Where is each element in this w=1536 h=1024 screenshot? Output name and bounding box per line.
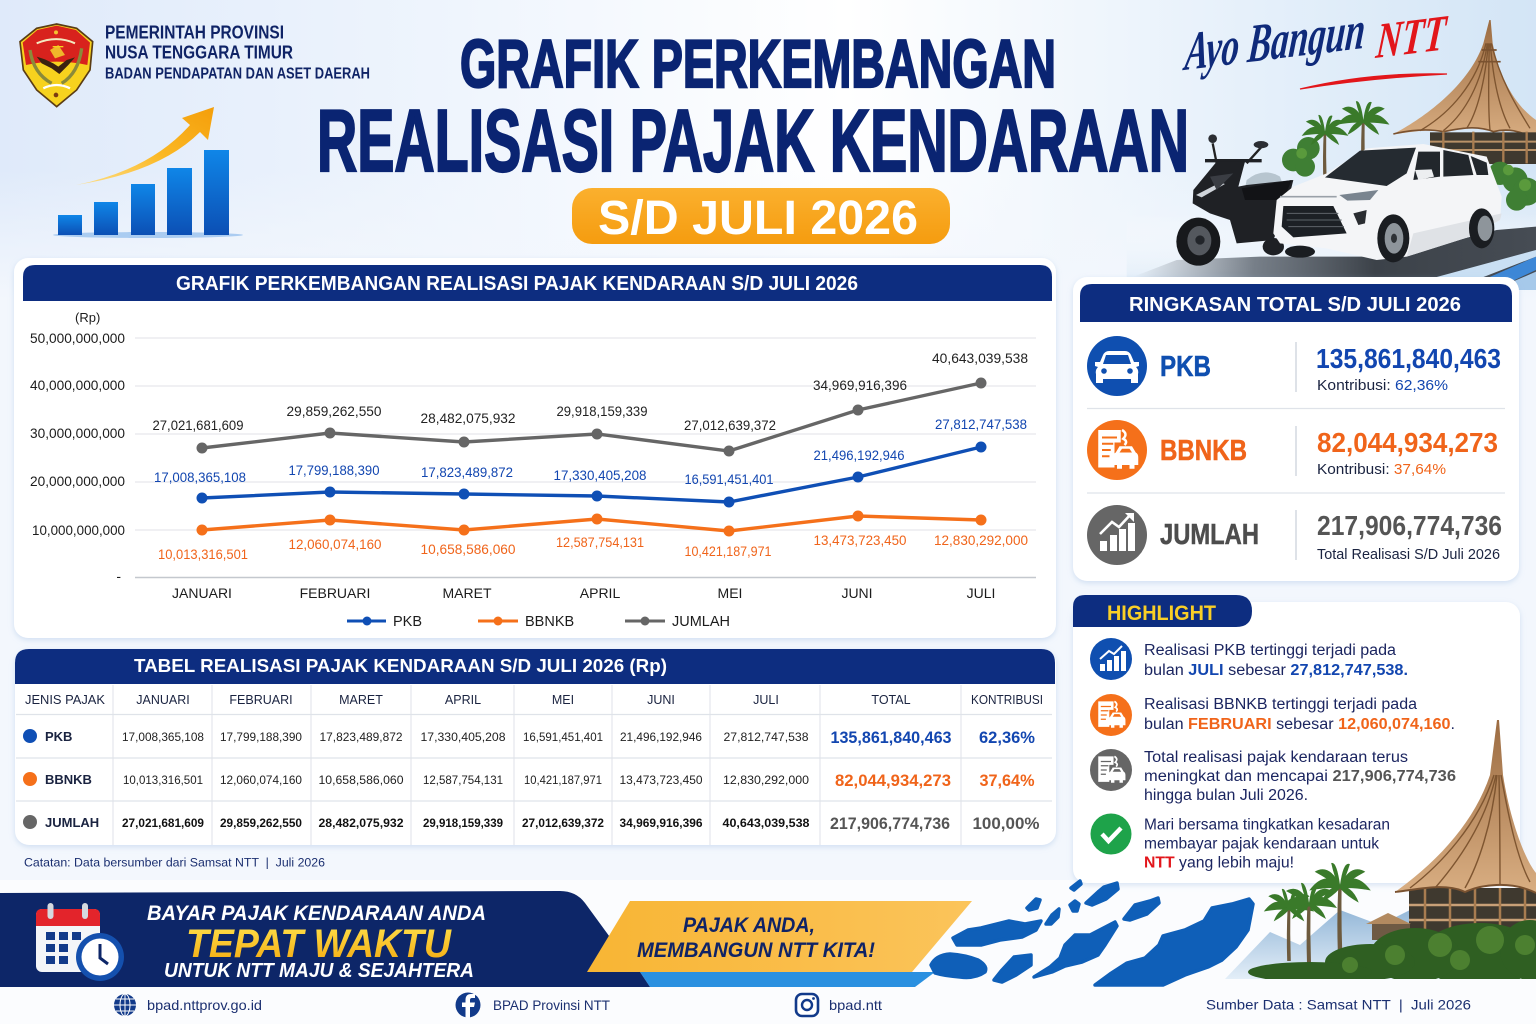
summary row: PKB [1087,336,1501,396]
row: BBNKB: 12,830,292,000 [723,773,809,787]
footer: facebook: BPAD Provinsi NTT [493,997,610,1013]
row: PKB: 17,330,405,208 [420,730,506,744]
table heading: TABEL REALISASI PAJAK KENDARAAN S/D JULI 2026 (Rp) [134,655,667,676]
data labels: JUMLAH: 27,021,681,609 [152,418,244,433]
footer: instagram: bpad.ntt [829,997,882,1013]
legend: PKB [393,614,422,630]
data labels: JUMLAH: 28,482,075,932 [420,411,516,426]
summary row: BBNKB: Kontribusi: 37,64% [1317,462,1446,478]
data labels: PKB: 16,591,451,401 [684,472,774,487]
data labels: PKB: 27,812,747,538 [935,417,1027,432]
highlight: PKB: bulan JULI sebesar 27,812,747,538. [1144,662,1408,679]
organisation name: NUSA TENGGARA TIMUR [105,42,293,62]
table column headers: JANUARI [136,693,190,707]
data labels: PKB [154,417,1027,487]
row: JUMLAH: 29,918,159,339 [423,816,503,830]
data labels: BBNKB: 10,421,187,971 [684,544,772,559]
x axis labels: APRIL [580,585,620,601]
footer: facebook [456,992,610,1018]
icon: rising bar chart with arrow [53,107,243,238]
table column headers [25,693,1043,707]
organisation name [105,22,370,82]
row: BBNKB: 13,473,723,450 [620,773,703,787]
data labels: BBNKB: 12,060,074,160 [288,537,382,552]
highlight: total [1090,749,1456,804]
organisation name: BADAN PENDAPATAN DAN ASET DAERAH [105,66,370,82]
highlight: BBNKB [1090,694,1455,736]
highlight: total: hingga bulan Juli 2026. [1144,787,1308,804]
legend: JUMLAH [672,614,730,630]
summary row: JUMLAH: Total Realisasi S/D Juli 2026 [1317,547,1500,563]
row: PKB: 16,591,451,401 [523,730,603,744]
x axis labels: JANUARI [172,585,232,601]
table note: Catatan: Data bersumber dari Samsat NTT | Juli 2026 [24,856,325,870]
summary row: BBNKB: BBNKB [1160,435,1247,467]
data labels: PKB: 17,799,188,390 [288,463,380,478]
x axis labels: MARET [442,585,492,601]
y axis labels: (Rp) [75,310,100,325]
title [317,26,1189,190]
y axis labels: 40,000,000,000 [30,377,125,393]
row: PKB: 17,799,188,390 [220,730,302,744]
summary row: BBNKB: 82,044,934,273 [1317,427,1498,458]
y axis labels: 50,000,000,000 [30,330,125,346]
panel: line chart [14,258,1056,638]
row: BBNKB: 10,421,187,971 [524,773,602,787]
summary row: PKB: PKB [1160,351,1211,383]
x axis labels: JUNI [841,585,873,601]
title: GRAFIK PERKEMBANGAN [460,26,1056,102]
slogan: pay on time: TEPAT WAKTU [186,922,452,966]
x axis labels [172,585,995,601]
panel: summary totals [1073,277,1519,581]
row: JUMLAH: JUMLAH [45,815,99,830]
summary row: PKB: Kontribusi: 62,36% [1317,378,1448,394]
data labels: JUMLAH: 29,859,262,550 [286,404,382,419]
data labels: BBNKB: 13,473,723,450 [814,533,906,548]
table column headers: JUNI [647,693,675,707]
panel: highlight [1073,595,1520,883]
data labels: PKB: 17,823,489,872 [421,465,513,480]
y axis labels: 10,000,000,000 [32,522,125,538]
highlight tab [1073,595,1252,627]
summary row: BBNKB [1087,420,1498,480]
legend [347,614,730,630]
row: PKB: 21,496,192,946 [620,730,702,744]
scooter [1176,134,1293,266]
logo: provincial shield [20,24,93,107]
row: BBNKB: 10,658,586,060 [318,773,404,787]
chart heading [23,265,1052,301]
data labels: BBNKB: 12,830,292,000 [934,533,1028,548]
row: JUMLAH: 27,021,681,609 [122,816,204,830]
row: BBNKB: 12,587,754,131 [423,773,503,787]
highlight: total: meningkat dan mencapai 217,906,774,736 [1144,768,1456,785]
row: PKB: 62,36% [979,728,1035,747]
x axis labels: MEI [718,585,742,601]
footer: instagram [796,994,882,1016]
callout: yellow parallelogram slogan: MEMBANGUN NTT KITA! [637,939,875,962]
highlight: PKB [1090,638,1408,680]
summary row: JUMLAH: 217,906,774,736 [1317,510,1502,541]
row: PKB: 135,861,840,463 [830,728,952,747]
x axis labels: JULI [967,585,995,601]
highlight: PKB: Realisasi PKB tertinggi terjadi pada [1144,642,1396,659]
row: JUMLAH: 34,969,916,396 [620,816,703,830]
map: NTT islands [931,881,1253,985]
table column headers: KONTRIBUSI [971,693,1043,707]
row: PKB: 17,008,365,108 [122,730,204,744]
row: JUMLAH: 28,482,075,932 [318,816,404,830]
date pill: S/D JULI 2026 [598,192,918,245]
row: JUMLAH [23,814,1040,833]
legend: BBNKB [525,614,574,630]
row: BBNKB: BBNKB [45,772,92,787]
callout: yellow parallelogram slogan [587,901,972,972]
chart heading: GRAFIK PERKEMBANGAN REALISASI PAJAK KENDARAAN S/D JULI 2026 [176,273,858,295]
row: BBNKB: 37,64% [980,771,1034,790]
row: JUMLAH: 100,00% [972,814,1040,833]
panel: data table [15,649,1056,845]
highlight: call to action: Mari bersama tingkatkan kesadaran [1144,816,1390,834]
highlight: call to action: membayar pajak kendaraan untuk [1144,836,1379,852]
highlight: call to action: NTT yang lebih maju! [1144,854,1294,872]
y axis labels [30,310,125,584]
data labels: BBNKB: 10,658,586,060 [420,542,516,557]
row: PKB: 27,812,747,538 [724,730,809,744]
data labels: PKB: 17,008,365,108 [154,470,246,485]
table column headers: JULI [753,693,779,707]
footer: website [114,994,262,1016]
highlight: BBNKB: Realisasi BBNKB tertinggi terjadi pada [1144,696,1417,713]
data labels: JUMLAH: 40,643,039,538 [932,351,1028,366]
summary row: PKB: 135,861,840,463 [1316,343,1501,374]
y axis labels: 20,000,000,000 [30,473,125,489]
table column headers: MEI [552,693,574,707]
row: BBNKB: 82,044,934,273 [835,771,951,790]
footer: website: bpad.nttprov.go.id [147,997,262,1013]
data labels: JUMLAH: 27,012,639,372 [684,418,776,433]
row: BBNKB [23,771,1034,790]
highlight: BBNKB: bulan FEBRUARI sebesar 12,060,074,160 . [1144,716,1455,733]
table column headers: TOTAL [871,693,911,707]
callout: yellow parallelogram slogan: PAJAK ANDA, [683,914,815,937]
summary heading: RINGKASAN TOTAL S/D JULI 2026 [1129,293,1461,316]
row: BBNKB: 10,013,316,501 [123,773,203,787]
highlight tab: HIGHLIGHT [1107,602,1216,625]
icon: calendar with clock [36,903,124,981]
data labels: JUMLAH: 29,918,159,339 [556,404,648,419]
summary heading [1080,284,1512,322]
slogan: pay on time: UNTUK NTT MAJU & SEJAHTERA [164,960,474,982]
highlight: call to action [1090,814,1390,872]
y axis labels: - [116,568,121,584]
slogan: pay on time [147,902,486,982]
summary row: JUMLAH: JUMLAH [1160,519,1259,551]
summary row: JUMLAH [1087,505,1502,565]
organisation name: PEMERINTAH PROVINSI [105,22,284,42]
data labels: BBNKB: 10,013,316,501 [158,547,248,562]
car [1273,144,1502,262]
row: JUMLAH: 27,012,639,372 [522,816,604,830]
table column headers: FEBRUARI [229,693,293,707]
footer: data source: Sumber Data : Samsat NTT | Juli 2026 [1206,996,1471,1012]
illustration: Kupang landmark with palms, scooter and car [1127,20,1536,290]
data labels: JUMLAH [152,351,1028,433]
table heading [15,649,1055,684]
row: PKB: PKB [45,729,72,744]
data labels: BBNKB [158,533,1028,562]
x axis labels: FEBRUARI [300,585,370,601]
illustration: landscape with mountains, palms and traditional house [1225,720,1536,989]
slogan: pay on time: BAYAR PAJAK KENDARAAN ANDA [147,902,486,925]
row: JUMLAH: 217,906,774,736 [830,814,950,833]
row: JUMLAH: 40,643,039,538 [722,816,810,830]
data labels: PKB: 21,496,192,946 [814,448,904,463]
series: PKB [196,442,986,508]
table column headers: MARET [339,693,383,707]
table column headers: APRIL [445,693,481,707]
row: BBNKB: 12,060,074,160 [220,773,302,787]
row: PKB: 17,823,489,872 [320,730,403,744]
data labels: PKB: 17,330,405,208 [554,468,646,483]
row: JUMLAH: 29,859,262,550 [220,816,302,830]
footer banner: navy ribbon [0,891,935,987]
data labels: BBNKB: 12,587,754,131 [556,535,644,550]
series: JUMLAH [196,378,986,456]
row: PKB [23,728,1035,747]
data labels: JUMLAH: 34,969,916,396 [813,378,907,393]
tagline: Ayo Bangun NTT: NTT [1373,4,1450,69]
table column headers: JENIS PAJAK [25,693,106,707]
highlight: total: Total realisasi pajak kendaraan terus [1144,749,1408,766]
y axis labels: 30,000,000,000 [30,425,125,441]
series: BBNKB [196,510,986,536]
